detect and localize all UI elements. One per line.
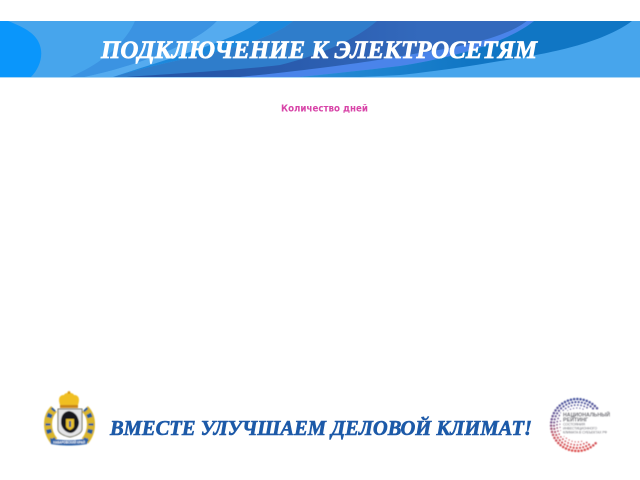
logo text: СОСТОЯНИЯ [563, 422, 585, 426]
shield [58, 409, 82, 437]
logo text: ИНВЕСТИЦИОННОГО [563, 426, 597, 430]
oak wreath [48, 409, 91, 441]
logo text: КЛИМАТА В СУБЪЕКТАХ РФ [563, 430, 607, 434]
logo text: НАЦИОНАЛЬНЫЙ [563, 410, 610, 418]
dotted ring [551, 399, 597, 451]
title: ПОДКЛЮЧЕНИЕ К ЭЛЕКТРОСЕТЯМ [100, 37, 538, 64]
logo text: РЕЙТИНГ [563, 416, 588, 424]
slogan: ВМЕСТЕ УЛУЧШАЕМ ДЕЛОВОЙ КЛИМАТ! [109, 416, 532, 440]
logo text [561, 410, 611, 436]
crown [59, 391, 79, 408]
chart caption: Количество дней [281, 104, 368, 114]
header banner [0, 21, 640, 78]
icon: Khabarovsk Krai coat of arms [48, 391, 91, 446]
ribbon: ХАБАРОВСКИЙ КРАЙ [53, 440, 86, 444]
icon: national rating logo [551, 399, 611, 451]
